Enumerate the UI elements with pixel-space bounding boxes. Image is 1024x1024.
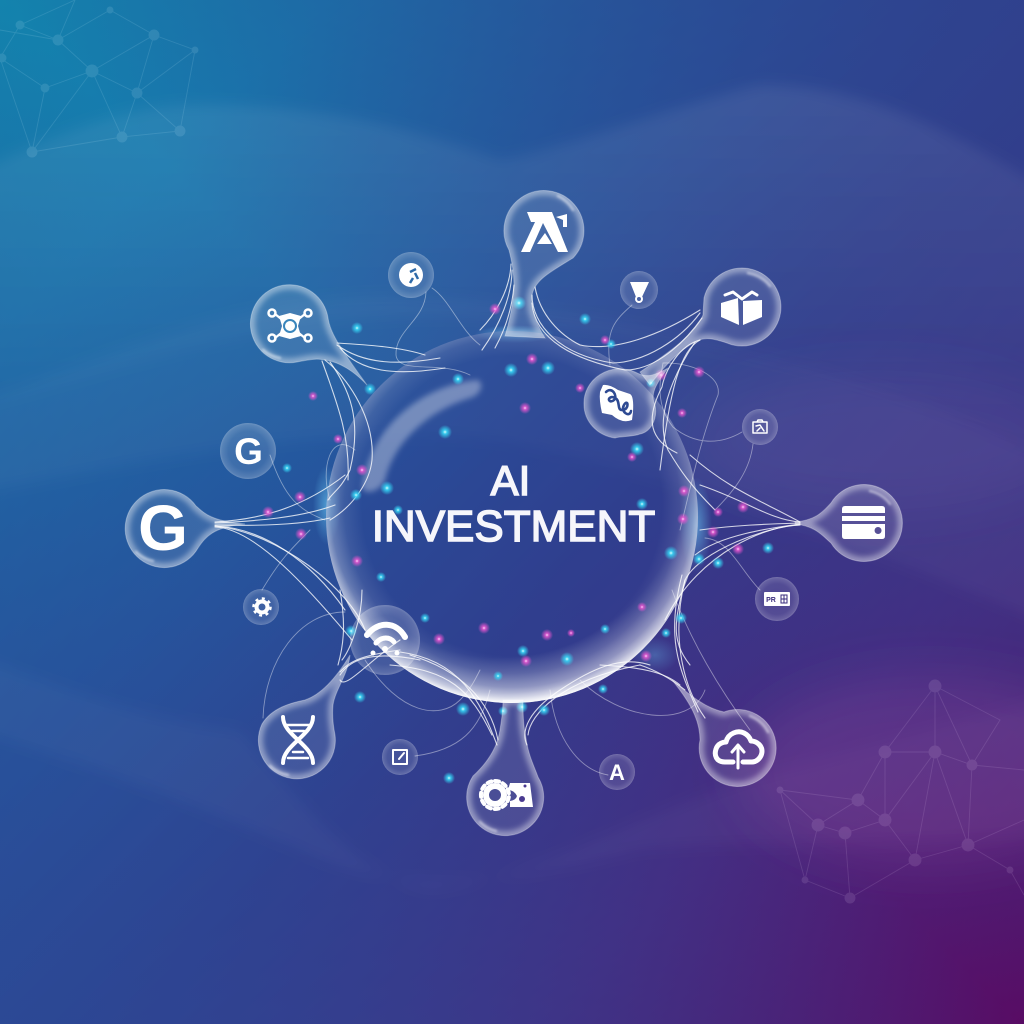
particles bbox=[262, 296, 774, 784]
network decoration: top left bbox=[0, 0, 198, 157]
icon: globe bbox=[399, 263, 423, 287]
icon: cloud upload bbox=[715, 732, 762, 768]
background flowing waves bbox=[0, 85, 1024, 890]
connection glow around sphere bbox=[313, 325, 712, 673]
node: top A logo bbox=[504, 191, 584, 338]
node: small square bbox=[382, 739, 418, 775]
node: small PR ticket bbox=[755, 577, 799, 621]
title: INVESTMENT bbox=[372, 502, 655, 551]
icon: frame bbox=[753, 420, 767, 433]
icon: A logo bbox=[521, 212, 568, 252]
network decoration: bottom right bbox=[777, 680, 1024, 903]
connector filaments: thin small nodes bbox=[262, 288, 760, 775]
icon: DNA helix bbox=[283, 717, 313, 763]
node: gear and puzzle bbox=[467, 700, 544, 836]
icon: credit card bbox=[842, 506, 885, 539]
icon: gear bbox=[254, 598, 270, 616]
icon: wifi bbox=[367, 625, 405, 656]
node: DNA bbox=[258, 655, 350, 779]
node: medium G bbox=[220, 423, 276, 479]
node: wifi bbox=[350, 605, 420, 675]
icon: chain document bbox=[600, 385, 633, 421]
main sphere bbox=[326, 331, 698, 703]
icon: G logo: G bbox=[138, 492, 188, 564]
sphere highlight bbox=[362, 380, 481, 492]
connector filaments: bright bbox=[215, 264, 800, 745]
node: small shuttlecock bbox=[620, 271, 658, 309]
node: credit card bbox=[795, 484, 902, 562]
node: small globe bbox=[388, 252, 434, 298]
icon: shuttlecock bbox=[630, 282, 649, 302]
node: open box bbox=[640, 268, 781, 385]
icon: box bbox=[721, 292, 762, 325]
icon: square bbox=[393, 750, 407, 764]
node: small gear bbox=[243, 589, 279, 625]
node: small frame bbox=[742, 409, 778, 445]
node: link chain bbox=[584, 368, 668, 438]
node: large G bbox=[125, 490, 245, 568]
node: cloud upload bbox=[672, 680, 776, 786]
node: small A bbox=[599, 754, 635, 790]
icon: A: A bbox=[609, 760, 625, 785]
icon: drone bbox=[268, 310, 312, 342]
title: AI bbox=[491, 457, 530, 504]
icon: PR ticket: PR bbox=[766, 597, 776, 604]
node: drone bbox=[250, 285, 367, 385]
icon: gear and puzzle bbox=[481, 781, 533, 809]
icon: G: G bbox=[234, 431, 263, 472]
title bbox=[372, 457, 655, 551]
